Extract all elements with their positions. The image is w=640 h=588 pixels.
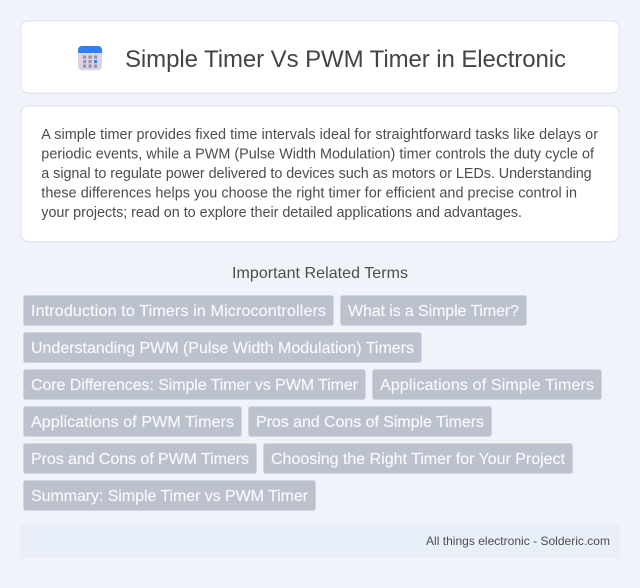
tags panel (24, 296, 602, 510)
tag: introduction: Introduction to Timers in Microcontrollers (31, 303, 326, 320)
tag: applications of simple timers: Applications of Simple Timers (380, 377, 594, 394)
panel: description (21, 106, 619, 242)
tag: pros and cons of simple timers: Pros and Cons of Simple Timers (256, 414, 484, 431)
tag: summary (24, 480, 316, 510)
title: Simple Timer Vs PWM Timer in Electronic (125, 46, 566, 73)
tag: choosing the right timer: Choosing the Right Timer for Your Project (271, 451, 566, 468)
tag: pros and cons of pwm timers: Pros and Cons of PWM Timers (31, 451, 249, 468)
description text: A simple timer provides fixed time intervals ideal for straightforward tasks like delays or (41, 127, 598, 143)
tag: applications of simple timers (372, 370, 602, 400)
tag: introduction (24, 296, 334, 326)
tag: core differences (24, 370, 366, 400)
description text: your projects; read on to explore their detailed applications and advantages. (41, 205, 522, 221)
tag: summary: Summary: Simple Timer vs PWM Timer (31, 488, 309, 505)
description text: these differences helps you choose the right timer for efficient and precise control in (41, 186, 577, 202)
tag: understanding pwm: Understanding PWM (Pulse Width Modulation) Timers (31, 340, 414, 357)
footer text: All things electronic - Solderic.com (426, 534, 610, 548)
icon: calendar (78, 46, 102, 70)
footer (20, 524, 620, 558)
description text: a signal to regulate power delivered to devices such as motors or LEDs. Understanding (41, 166, 592, 182)
tag: core differences: Core Differences: Simple Timer vs PWM Timer (31, 377, 359, 394)
heading: important related terms: Important Related Terms (232, 265, 408, 282)
header panel (21, 21, 619, 93)
tag: simple timer (340, 296, 526, 326)
tag: applications of pwm timers: Applications of PWM Timers (31, 414, 234, 431)
tag: understanding pwm (24, 332, 422, 362)
description text (41, 127, 598, 221)
tag: pros and cons of simple timers (248, 406, 492, 436)
tag: choosing the right timer (264, 444, 572, 474)
tag: applications of pwm timers (24, 406, 242, 436)
tag: simple timer: What is a Simple Timer? (348, 303, 519, 320)
description text: periodic events, while a PWM (Pulse Width Modulation) timer controls the duty cycle of (41, 146, 595, 162)
tag: pros and cons of pwm timers (24, 444, 256, 474)
